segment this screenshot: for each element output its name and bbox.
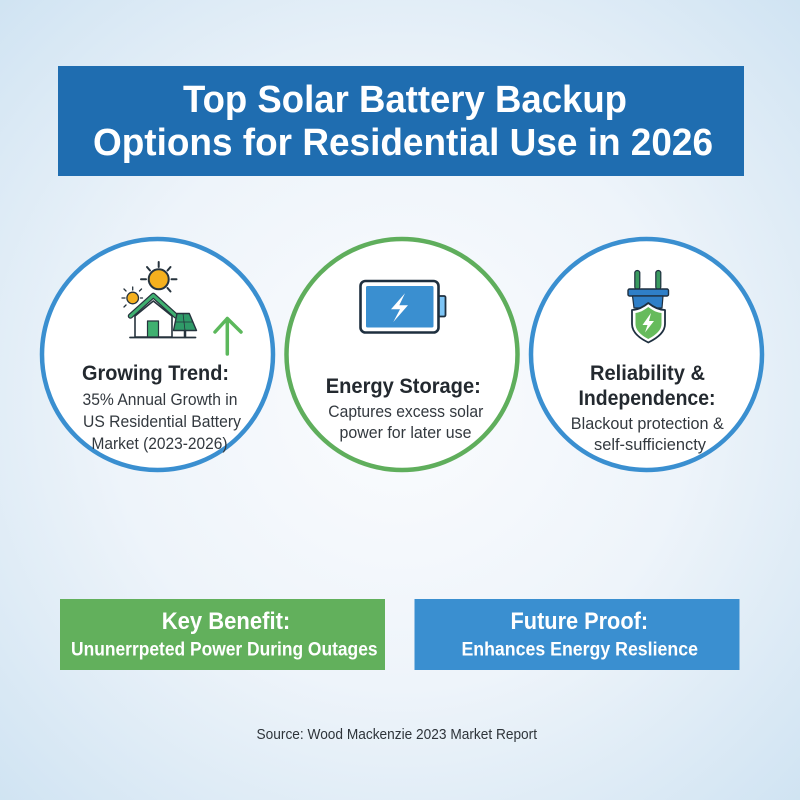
text: reliability description: self-sufficiencty [594, 436, 707, 454]
title banner [58, 66, 744, 176]
text: energy storage description: Captures excess solar [328, 403, 484, 421]
title line 1: Top Solar Battery Backup [183, 79, 627, 121]
callout: future proof [414, 599, 740, 670]
panel: reliability and independence [531, 239, 762, 470]
title line 2: Options for Residential Use in 2026 [93, 122, 713, 164]
icon: house with suns and solar panel [122, 262, 196, 338]
text: energy storage description [328, 403, 484, 442]
heading: reliability and independence: Independence: [578, 387, 716, 410]
heading: reliability and independence: Reliability & [590, 362, 705, 385]
icon: plug with shield [628, 270, 668, 342]
text: energy storage description: power for later use [340, 424, 472, 442]
text: reliability description [571, 415, 724, 454]
heading: growing trend: Growing Trend: [82, 362, 229, 385]
panel: energy storage [286, 239, 518, 470]
text: growth statistic [82, 391, 242, 453]
panel: growing trend [42, 239, 273, 470]
heading: reliability and independence [578, 362, 716, 410]
text: growth statistic: Market (2023-2026) [92, 435, 228, 453]
text: growth statistic: 35% Annual Growth in [82, 391, 238, 409]
callout text: key benefit: Ununerrpeted Power During Outages [71, 640, 378, 660]
source note: Source: Wood Mackenzie 2023 Market Report [257, 726, 538, 743]
text: reliability description: Blackout protection & [571, 415, 724, 433]
icon: battery [360, 281, 446, 332]
text: growth statistic: US Residential Battery [83, 413, 242, 431]
heading: energy storage: Energy Storage: [326, 375, 481, 398]
callout heading: key benefit: Key Benefit: [162, 608, 290, 635]
callout heading: future proof: Future Proof: [511, 608, 648, 635]
callout text: future proof: Enhances Energy Reslience [461, 640, 698, 660]
icon: green up arrow [215, 318, 241, 354]
callout: key benefit [60, 599, 385, 670]
